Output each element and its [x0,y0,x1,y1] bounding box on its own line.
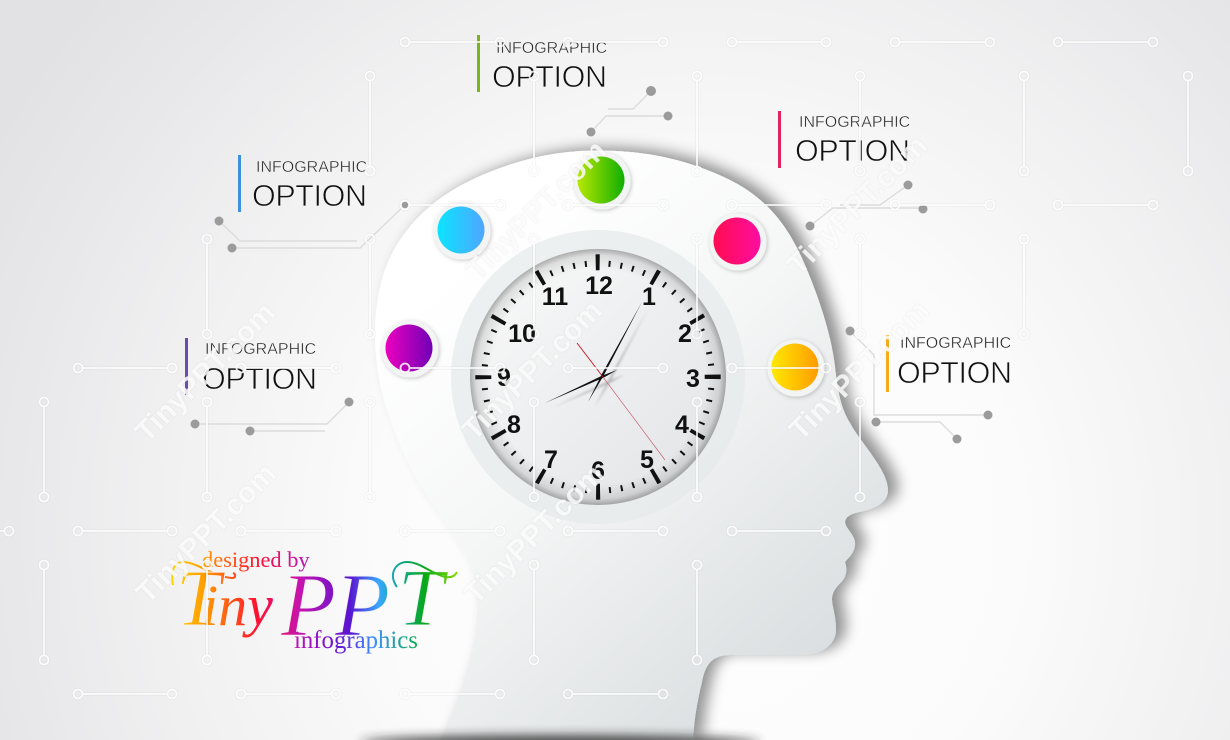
clock hands [545,302,665,460]
logo: designed by TinyPPT infographics: infographics [294,627,418,654]
watermarks: TinyPPT.com [456,294,609,447]
option label: purple: OPTION [202,362,317,396]
head silhouette [375,151,888,740]
logo: designed by TinyPPT infographics: T [176,555,226,643]
clock numerals: 10 [508,320,536,348]
marker: green [574,152,630,210]
watermarks: TinyPPT.com [458,458,611,611]
clock numerals: 6 [591,457,605,485]
option label: green: OPTION [492,60,607,94]
clock numerals: 2 [678,320,692,348]
clock numerals: 3 [686,365,700,393]
clock ticks [483,262,713,492]
option label: pink [778,111,910,168]
clock numerals [497,272,700,485]
watermarks: TinyPPT.com [460,134,613,287]
marker: purple [382,320,438,378]
clock numerals: 1 [642,283,656,311]
option label: purple: INFOGRAPHIC [205,341,316,358]
clock numerals: 7 [544,446,558,474]
logo: designed by TinyPPT infographics [172,547,457,655]
clock numerals: 5 [640,446,654,474]
option label: blue: OPTION [252,179,367,213]
logo: designed by TinyPPT infographics: designed by [202,547,310,572]
watermarks: TinyPPT.com [781,129,934,282]
connector dots [190,86,992,444]
logo: designed by TinyPPT infographics: iny [202,573,273,638]
logo: designed by TinyPPT infographics: T [398,552,449,643]
option label: purple [185,338,317,396]
option markers [382,152,824,396]
option label: orange: OPTION [897,356,1012,390]
option label: orange: INFOGRAPHIC [900,335,1011,352]
base shadow [360,735,760,740]
marker: pink [710,214,766,270]
watermarks [129,129,936,611]
logo: designed by TinyPPT infographics: P [280,556,336,655]
marker: yellow [768,340,824,396]
option label: pink: INFOGRAPHIC [799,114,910,131]
clock numerals: 8 [507,411,521,439]
clock numerals: 12 [585,272,613,300]
clock numerals: 11 [542,283,568,311]
watermarks: TinyPPT.com [783,294,936,447]
option label: pink: OPTION [795,134,910,168]
option label: blue: INFOGRAPHIC [256,159,367,176]
logo: designed by TinyPPT infographics: P [334,556,390,655]
clock [451,230,745,524]
option label: blue [238,155,367,213]
option label: green: INFOGRAPHIC [496,40,607,57]
option label: orange [886,335,1012,392]
clock numerals: 9 [497,364,511,392]
watermarks: TinyPPT.com [129,296,282,449]
option label: green [477,35,607,94]
watermarks: TinyPPT.com [130,457,283,610]
marker: cyan [434,202,490,260]
clock numerals: 4 [675,411,689,439]
